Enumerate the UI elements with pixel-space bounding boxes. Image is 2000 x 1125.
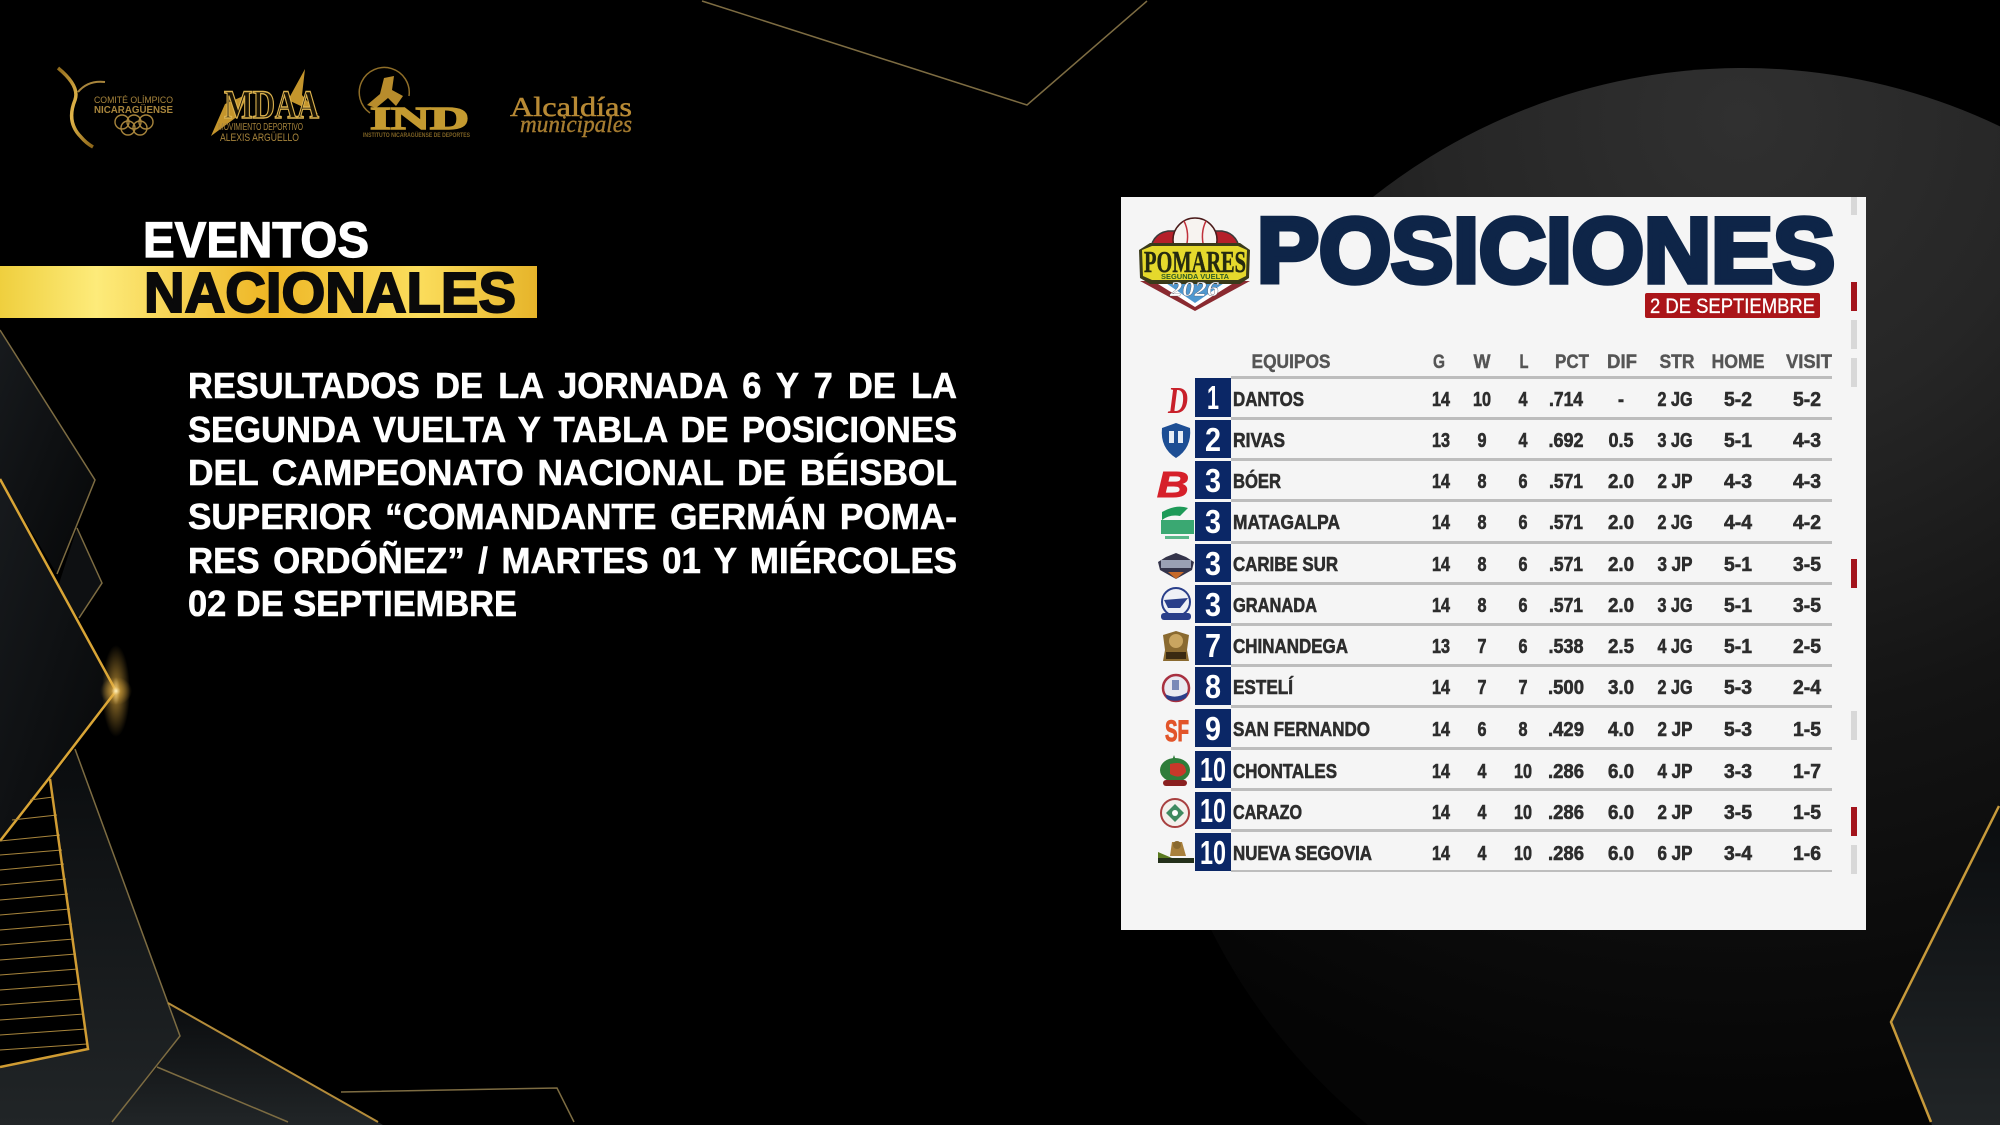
row 10: Chontales: 3-3	[1724, 761, 1752, 783]
row 3: Bóer: 3	[1205, 462, 1221, 499]
icon: Dantos: D	[1167, 380, 1188, 422]
icon: Matagalpa	[1161, 507, 1194, 539]
body text: DEL CAMPEONATO NACIONAL DE BÉISBOL	[188, 452, 957, 493]
row 1: Dantos: 14	[1432, 389, 1451, 411]
table header: G	[1433, 352, 1445, 373]
row 3: Bóer: 4-3	[1724, 471, 1752, 493]
row 1: Dantos: .714	[1549, 389, 1584, 411]
row 6: Granada: 5-1	[1724, 595, 1752, 617]
row 9: San Fernando: SAN FERNANDO	[1233, 719, 1370, 741]
row 6: Granada: 3 JG	[1658, 595, 1692, 617]
logo: MDAA: MOVIMIENTO DEPORTIVO	[218, 122, 303, 133]
row 1: Dantos: 10	[1473, 389, 1491, 411]
row 8: Estelí: .500	[1548, 677, 1584, 699]
logo: Alcaldías municipales: Alcaldías	[510, 92, 632, 122]
row 4: Matagalpa: 6	[1518, 512, 1528, 534]
row 6: Granada: .571	[1549, 595, 1583, 617]
row 9: San Fernando: 4.0	[1608, 719, 1634, 741]
row 7: Chinandega: 2-5	[1793, 636, 1821, 658]
table header: DIF	[1607, 352, 1637, 373]
logo: IND	[359, 67, 470, 139]
title: POSICIONES	[1257, 200, 1835, 302]
row 10: Chontales	[1160, 751, 1821, 788]
row 7: Chinandega: 13	[1432, 636, 1450, 658]
row 9: San Fernando: 6	[1478, 719, 1486, 741]
row 9: San Fernando: 14	[1432, 719, 1451, 741]
icon: Chinandega	[1163, 631, 1189, 661]
row 9: San Fernando	[1165, 709, 1821, 748]
logo: MDAA: MDAA	[224, 82, 319, 127]
row 2: Rivas: 13	[1432, 430, 1450, 452]
logo: Alcaldías municipales: municipales	[520, 112, 632, 138]
scroll marks	[1851, 197, 1857, 874]
logo: Pomares 2026: POMARES	[1144, 244, 1246, 279]
row 3: Bóer: 2.0	[1608, 471, 1634, 493]
row 12: Nueva Segovia: 14	[1432, 843, 1451, 865]
decoration: left gold polygons	[0, 330, 574, 1125]
logo: Comité Olímpico Nicaragüense: COMITÉ OLÍMPICO	[94, 95, 173, 106]
row 4: Matagalpa: 3	[1205, 503, 1221, 540]
row 7: Chinandega: .538	[1548, 636, 1584, 658]
row 8: Estelí: 14	[1432, 677, 1451, 699]
row 4: Matagalpa: 2.0	[1608, 512, 1634, 534]
row 4: Matagalpa: 4-2	[1793, 512, 1821, 534]
row 10: Chontales: 14	[1432, 761, 1451, 783]
row 8: Estelí	[1163, 667, 1822, 705]
row 10: Chontales: 1-7	[1793, 761, 1821, 783]
logo: Comité Olímpico Nicaragüense: NICARAGÜENSE	[94, 103, 173, 116]
row 2: Rivas: 5-1	[1724, 430, 1752, 452]
row 7: Chinandega: 4 JG	[1658, 636, 1692, 658]
logo: Pomares 2026: SEGUNDA VUELTA	[1161, 274, 1229, 281]
row 12: Nueva Segovia: 10	[1514, 843, 1532, 865]
row 1: Dantos: 5-2	[1724, 389, 1752, 411]
row 11: Carazo: .286	[1548, 802, 1584, 824]
row 4: Matagalpa: MATAGALPA	[1233, 512, 1340, 534]
row 11: Carazo	[1161, 792, 1821, 829]
table header: W	[1474, 352, 1491, 373]
row 7: Chinandega	[1163, 626, 1821, 665]
row 10: Chontales: 4	[1478, 761, 1487, 783]
row 8: Estelí: 8	[1205, 668, 1221, 705]
background circle	[1148, 68, 2000, 1125]
logo: MDAA: ALEXIS ARGÜELLO	[220, 132, 299, 144]
row 12: Nueva Segovia: 6 JP	[1658, 843, 1692, 865]
row 9: San Fernando: 5-3	[1724, 719, 1752, 741]
row 6: Granada	[1161, 585, 1821, 623]
row 12: Nueva Segovia	[1158, 833, 1821, 871]
row 10: Chontales: .286	[1548, 761, 1584, 783]
row 9: San Fernando: 2 JP	[1658, 719, 1692, 741]
row 1: Dantos: 5-2	[1793, 389, 1821, 411]
logo: Alcaldías municipales	[510, 92, 632, 138]
icon: Granada	[1161, 588, 1191, 620]
table header: EQUIPOS	[1252, 352, 1330, 373]
table header: HOME	[1712, 352, 1764, 373]
logo: Pomares 2026	[1139, 218, 1250, 311]
row 10: Chontales: 6.0	[1608, 761, 1634, 783]
row 2: Rivas: 4-3	[1793, 430, 1821, 452]
row 8: Estelí: 2-4	[1793, 677, 1822, 699]
decoration: bottom right gold polygon	[1891, 804, 2000, 1125]
row 9: San Fernando: 1-5	[1793, 719, 1821, 741]
icon: Bóer: B	[1157, 464, 1189, 505]
row 12: Nueva Segovia: NUEVA SEGOVIA	[1233, 843, 1372, 865]
row 3: Bóer: BÓER	[1233, 469, 1281, 493]
icon: Chontales	[1160, 755, 1190, 786]
body text: 02 DE SEPTIEMBRE	[188, 583, 517, 624]
logo: Comité Olímpico Nicaragüense	[58, 68, 173, 147]
decoration: top gold line	[702, 1, 1147, 105]
row 3: Bóer	[1157, 461, 1821, 505]
row 11: Carazo: 10	[1200, 792, 1226, 829]
row 2: Rivas: .692	[1548, 430, 1584, 452]
row 5: Caribe Sur: CARIBE SUR	[1233, 554, 1338, 576]
row 5: Caribe Sur: .571	[1549, 554, 1583, 576]
row 2: Rivas: 9	[1478, 430, 1486, 452]
icon: Carazo	[1161, 799, 1189, 827]
row 9: San Fernando: 8	[1518, 719, 1528, 741]
row 6: Granada: 8	[1478, 595, 1486, 617]
row 6: Granada: 6	[1518, 595, 1528, 617]
row 6: Granada: 14	[1432, 595, 1451, 617]
logo: MDAA	[211, 69, 319, 144]
row 12: Nueva Segovia: 4	[1478, 843, 1487, 865]
row 4: Matagalpa: 4-4	[1724, 512, 1753, 534]
row 2: Rivas: 4	[1518, 430, 1528, 452]
row 11: Carazo: 1-5	[1793, 802, 1821, 824]
row 10: Chontales: 10	[1200, 751, 1226, 788]
row 3: Bóer: 14	[1432, 471, 1451, 493]
row 2: Rivas: 3 JG	[1658, 430, 1692, 452]
row 2: Rivas: 0.5	[1608, 430, 1634, 452]
icon: Estelí	[1163, 675, 1189, 701]
body text: SEGUNDA VUELTA Y TABLA DE POSICIONES	[188, 409, 957, 450]
row 6: Granada: GRANADA	[1233, 595, 1317, 617]
row 11: Carazo: 14	[1432, 802, 1451, 824]
row 12: Nueva Segovia: 6.0	[1608, 843, 1634, 865]
row separators	[1231, 376, 1832, 872]
row 6: Granada: 3	[1205, 586, 1221, 623]
icon: Caribe Sur	[1158, 553, 1194, 579]
row 3: Bóer: 4-3	[1793, 471, 1821, 493]
row 7: Chinandega: 7	[1205, 627, 1221, 664]
row 6: Granada: 3-5	[1793, 595, 1821, 617]
row 8: Estelí: 5-3	[1724, 677, 1752, 699]
row 10: Chontales: 4 JP	[1658, 761, 1692, 783]
heading line 2: NACIONALES	[144, 261, 516, 325]
row 2: Rivas: RIVAS	[1233, 430, 1285, 452]
row 12: Nueva Segovia: .286	[1548, 843, 1584, 865]
row 4: Matagalpa: 14	[1432, 512, 1451, 534]
logo: IND: INSTITUTO NICARAGÜENSE DE DEPORTES	[363, 132, 470, 139]
row 1: Dantos: 2 JG	[1658, 389, 1692, 411]
row 3: Bóer: .571	[1549, 471, 1583, 493]
row 8: Estelí: 2 JG	[1658, 677, 1692, 699]
row 5: Caribe Sur: 5-1	[1724, 554, 1752, 576]
icon: Nueva Segovia	[1158, 841, 1194, 863]
row 8: Estelí: 3.0	[1608, 677, 1634, 699]
row 5: Caribe Sur: 3 JP	[1658, 554, 1692, 576]
row 5: Caribe Sur: 8	[1478, 554, 1486, 576]
row 4: Matagalpa: 2 JG	[1658, 512, 1692, 534]
heading: Eventos Nacionales	[0, 212, 537, 325]
row 4: Matagalpa: 8	[1478, 512, 1486, 534]
row 1: Dantos: 4	[1518, 389, 1528, 411]
row 11: Carazo: 10	[1514, 802, 1532, 824]
row 7: Chinandega: 2.5	[1608, 636, 1634, 658]
body text	[188, 365, 957, 624]
panel: standings table	[1121, 197, 1866, 930]
row 1: Dantos	[1167, 378, 1821, 422]
body text: RESULTADOS DE LA JORNADA 6 Y 7 DE LA	[188, 365, 957, 406]
row 2: Rivas	[1162, 420, 1821, 458]
row 6: Granada: 2.0	[1608, 595, 1634, 617]
table header: VISIT	[1786, 352, 1832, 373]
row 5: Caribe Sur: 3	[1205, 545, 1221, 582]
row 3: Bóer: 8	[1478, 471, 1486, 493]
row 5: Caribe Sur: 6	[1518, 554, 1528, 576]
row 8: Estelí: ESTELÍ	[1233, 676, 1293, 699]
row 12: Nueva Segovia: 10	[1200, 834, 1226, 871]
row 5: Caribe Sur: 14	[1432, 554, 1451, 576]
row 7: Chinandega: CHINANDEGA	[1233, 636, 1348, 658]
row 12: Nueva Segovia: 1-6	[1793, 843, 1821, 865]
row 5: Caribe Sur	[1158, 544, 1821, 582]
row 5: Caribe Sur: 2.0	[1608, 554, 1634, 576]
row 4: Matagalpa: .571	[1549, 512, 1583, 534]
row 11: Carazo: CARAZO	[1233, 802, 1302, 824]
row 4: Matagalpa	[1161, 502, 1821, 541]
row 8: Estelí: 7	[1518, 677, 1528, 699]
row 1: Dantos: DANTOS	[1233, 389, 1304, 411]
row 10: Chontales: 10	[1514, 761, 1532, 783]
row 3: Bóer: 2 JP	[1658, 471, 1692, 493]
date badge: 2 DE SEPTIEMBRE	[1650, 295, 1815, 318]
table header	[1252, 352, 1832, 373]
row 5: Caribe Sur: 3-5	[1793, 554, 1821, 576]
row 2: Rivas: 2	[1205, 421, 1221, 458]
row 7: Chinandega: 5-1	[1724, 636, 1752, 658]
row 9: San Fernando: 9	[1205, 710, 1221, 747]
body text: SUPERIOR “COMANDANTE GERMÁN POMA-	[188, 496, 957, 537]
icon: Rivas	[1162, 423, 1190, 458]
row 7: Chinandega: 7	[1478, 636, 1486, 658]
icon: San Fernando: SF	[1165, 715, 1189, 748]
body text: RES ORDÓÑEZ” / MARTES 01 Y MIÉRCOLES	[188, 539, 957, 581]
gold band	[0, 266, 537, 318]
row 3: Bóer: 6	[1518, 471, 1528, 493]
table header: STR	[1660, 352, 1695, 373]
row 11: Carazo: 2 JP	[1658, 802, 1692, 824]
row 1: Dantos: 1	[1207, 379, 1219, 416]
logo: Pomares 2026: 2026	[1169, 277, 1220, 301]
logo: IND: IND	[370, 100, 469, 136]
heading line 1: EVENTOS	[143, 212, 369, 268]
row 11: Carazo: 6.0	[1608, 802, 1634, 824]
table header: L	[1520, 352, 1529, 373]
row 12: Nueva Segovia: 3-4	[1724, 843, 1753, 865]
row 9: San Fernando: .429	[1548, 719, 1584, 741]
row 7: Chinandega: 6	[1518, 636, 1528, 658]
row 11: Carazo: 3-5	[1724, 802, 1752, 824]
table header: PCT	[1555, 352, 1589, 373]
row 11: Carazo: 4	[1478, 802, 1487, 824]
row 10: Chontales: CHONTALES	[1233, 761, 1337, 783]
row 8: Estelí: 7	[1478, 677, 1486, 699]
row 1: Dantos: -	[1618, 389, 1624, 411]
